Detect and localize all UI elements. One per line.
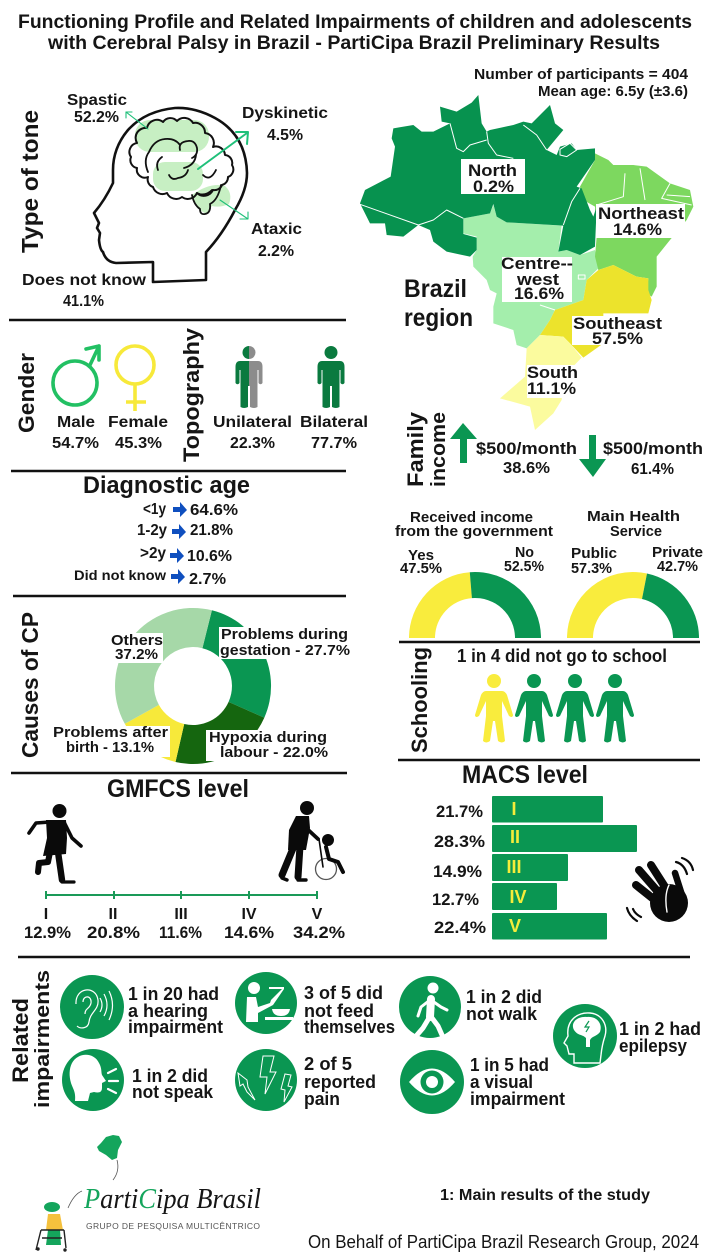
heading: related impairments bbox=[8, 970, 54, 1108]
label: above 500 per month: 38.6% bbox=[503, 460, 550, 477]
label: female: Female bbox=[108, 414, 168, 431]
label: bilateral: Bilateral bbox=[300, 414, 368, 431]
bar IV: 12.7% bbox=[432, 890, 479, 909]
map label: North: North bbox=[468, 161, 517, 180]
bar III: III bbox=[506, 857, 522, 877]
label: yes bbox=[400, 547, 442, 577]
text: 1 in 20 had bbox=[128, 984, 219, 1004]
map label: Southeast bbox=[572, 314, 664, 348]
map label: Southeast: 57.5% bbox=[592, 329, 643, 348]
label: problems after birth: Problems after bbox=[53, 724, 168, 741]
label: bilateral: 77.7% bbox=[311, 435, 357, 452]
map label: Centre-west: Centre-- bbox=[501, 254, 573, 273]
arrows: tone indicators bbox=[126, 112, 248, 219]
icon: lightning bolts bbox=[235, 1049, 297, 1111]
level I: I bbox=[44, 906, 48, 923]
icon: green child 3 bbox=[596, 674, 634, 742]
row: under 1y: 64.6% bbox=[190, 502, 238, 519]
label: unilateral: Unilateral bbox=[213, 414, 292, 431]
bar II bbox=[434, 825, 637, 852]
caption: main results: 1: Main results of the study bbox=[440, 1187, 650, 1204]
label: hypoxia during labour bbox=[206, 729, 330, 761]
panel: participants summary: Number of participants = 404 bbox=[474, 66, 689, 83]
label: does not know: Does not know bbox=[22, 272, 147, 289]
gauge chart bbox=[567, 572, 699, 638]
icon: running child bbox=[29, 804, 81, 882]
label: private: Private bbox=[652, 544, 703, 561]
label: others: Others bbox=[111, 632, 163, 649]
item: speaking bbox=[62, 1049, 214, 1111]
bar III: 14.9% bbox=[433, 862, 482, 881]
icon: person eating bbox=[235, 972, 297, 1034]
row: did not know bbox=[74, 567, 226, 588]
label: no: 52.5% bbox=[504, 558, 544, 575]
bar I bbox=[436, 796, 603, 822]
level II: 20.8% bbox=[87, 923, 140, 942]
icon: green child 1 bbox=[515, 674, 553, 742]
label: male: 54.7% bbox=[52, 435, 99, 452]
map label: South bbox=[527, 363, 579, 398]
panel: causes of CP bbox=[17, 608, 350, 764]
icon: yellow child bbox=[475, 674, 513, 742]
bar IV bbox=[432, 883, 557, 910]
label: below 500 per month bbox=[603, 439, 703, 478]
label: public: 57.3% bbox=[571, 560, 612, 577]
label: female bbox=[108, 414, 168, 452]
level III bbox=[159, 906, 202, 942]
level II: II bbox=[109, 906, 117, 923]
logo subtitle: GRUPO DE PESQUISA MULTICÊNTRICO bbox=[86, 1221, 260, 1231]
label: ataxic: Ataxic bbox=[251, 221, 302, 238]
text bbox=[304, 1054, 376, 1109]
row: over 2y: 10.6% bbox=[187, 548, 232, 565]
bar V: V bbox=[509, 916, 521, 936]
heading: diagnostic age: Diagnostic age bbox=[83, 472, 250, 499]
label: problems after birth: birth - 13.1% bbox=[66, 739, 154, 756]
icon: walking person bbox=[399, 976, 461, 1038]
text bbox=[470, 1055, 565, 1109]
text: epilepsy bbox=[619, 1036, 687, 1056]
icon: bilateral person bbox=[318, 346, 344, 408]
label: ataxic bbox=[251, 221, 302, 260]
heading bbox=[395, 509, 553, 540]
item: pain bbox=[235, 1049, 376, 1111]
heading: type of tone: Type of tone bbox=[17, 110, 43, 253]
level V: V bbox=[312, 906, 323, 923]
label: male: Male bbox=[57, 414, 95, 431]
item: epilepsy bbox=[553, 1004, 701, 1068]
label: spastic bbox=[67, 92, 127, 126]
icon: speaking head bbox=[62, 1049, 124, 1111]
heading: from the government bbox=[395, 523, 553, 540]
label: no: No bbox=[515, 544, 534, 561]
label: above 500 per month: $500/month bbox=[476, 439, 577, 458]
heading: Service bbox=[610, 523, 662, 540]
heading: family income bbox=[403, 411, 450, 487]
row: under 1y bbox=[143, 501, 238, 519]
icon: ear bbox=[60, 975, 124, 1039]
label: problems during gestation bbox=[219, 626, 350, 659]
label: yes: 47.5% bbox=[400, 560, 442, 577]
text: not feed bbox=[304, 1001, 374, 1021]
heading bbox=[587, 508, 680, 540]
map label: Northeast bbox=[596, 204, 685, 239]
panel: type of tone bbox=[17, 92, 328, 310]
panel: diagnostic age bbox=[74, 472, 250, 588]
heading: schooling: Schooling bbox=[407, 647, 432, 753]
bar II: II bbox=[510, 827, 520, 847]
heading: Brazil region: Brazil bbox=[404, 275, 467, 303]
map label: Southeast: Southeast bbox=[573, 314, 662, 333]
bar I: I bbox=[511, 799, 517, 819]
bar I: 21.7% bbox=[436, 802, 483, 821]
row: over 2y: >2y bbox=[140, 545, 166, 562]
title bbox=[18, 11, 692, 54]
text: 1 in 2 did bbox=[466, 987, 542, 1007]
text: impairment bbox=[470, 1089, 565, 1109]
item: walking bbox=[399, 976, 542, 1038]
timeline bbox=[46, 891, 317, 899]
label: spastic: 52.2% bbox=[74, 109, 119, 126]
text bbox=[619, 1019, 701, 1056]
level I bbox=[24, 906, 71, 942]
icon: brain bbox=[129, 118, 233, 214]
panel: gender bbox=[14, 346, 168, 452]
label: problems after birth bbox=[52, 724, 170, 757]
row: did not know: Did not know bbox=[74, 567, 166, 583]
icon: male symbol bbox=[53, 346, 99, 405]
level III: III bbox=[174, 906, 188, 923]
map label: Centre-west: 16.6% bbox=[514, 284, 564, 303]
label: does not know bbox=[22, 272, 147, 310]
label: does not know: 41.1% bbox=[63, 293, 104, 310]
icon: green child 2 bbox=[556, 674, 594, 742]
panel: Brazil region map bbox=[360, 95, 693, 430]
panel: family income bbox=[403, 411, 703, 487]
heading: Main Health bbox=[587, 508, 680, 525]
label: public bbox=[571, 545, 617, 577]
text: a visual bbox=[470, 1072, 533, 1092]
label: dyskinetic bbox=[242, 105, 328, 144]
panel: main health service bbox=[567, 508, 703, 638]
donut chart bbox=[115, 608, 271, 764]
bar IV: IV bbox=[509, 887, 527, 907]
item: vision bbox=[400, 1050, 565, 1114]
bar V bbox=[434, 913, 607, 940]
icon: Brazil balloon bbox=[68, 1135, 122, 1208]
heading: family income: Family bbox=[403, 411, 428, 487]
text bbox=[128, 984, 223, 1037]
label: private: 42.7% bbox=[657, 558, 698, 575]
heading: gender: Gender bbox=[14, 353, 39, 433]
label: spastic: Spastic bbox=[67, 92, 127, 109]
map label: North: 0.2% bbox=[473, 177, 514, 196]
level I: 12.9% bbox=[24, 923, 71, 942]
label: problems during gestation: Problems during bbox=[221, 626, 348, 643]
level V bbox=[293, 906, 345, 942]
text: impairment bbox=[128, 1017, 223, 1037]
text: not walk bbox=[466, 1004, 538, 1024]
label: no bbox=[504, 544, 544, 575]
icon: up arrow bbox=[450, 423, 477, 463]
level IV: IV bbox=[241, 906, 257, 923]
label: others: 37.2% bbox=[115, 646, 158, 663]
text bbox=[132, 1066, 214, 1102]
text bbox=[304, 983, 395, 1037]
text: a hearing bbox=[128, 1001, 208, 1021]
label: hypoxia during labour: labour - 22.0% bbox=[220, 744, 328, 761]
row: 1-2y: 21.8% bbox=[190, 522, 233, 539]
heading: Brazil region: region bbox=[404, 304, 473, 332]
heading: family income: income bbox=[428, 412, 450, 487]
logo: PartiCipa Brasil bbox=[36, 1135, 261, 1252]
icon: unilateral person bbox=[236, 346, 262, 408]
heading: related impairments: Related bbox=[8, 998, 33, 1083]
map label: Centre-west bbox=[501, 254, 573, 303]
title: Functioning Profile and Related Impairments of children and adolescents bbox=[18, 11, 692, 33]
label: ataxic: 2.2% bbox=[258, 243, 294, 260]
bar III bbox=[433, 854, 568, 881]
text: not speak bbox=[132, 1082, 214, 1102]
map label: Centre-west: west bbox=[516, 270, 559, 289]
label: below 500 per month: 61.4% bbox=[631, 461, 674, 478]
text: themselves bbox=[304, 1017, 395, 1037]
panel: related impairments bbox=[8, 970, 701, 1114]
text: 3 of 5 did bbox=[304, 983, 383, 1003]
row: over 2y bbox=[140, 545, 232, 565]
panel: participants summary bbox=[474, 66, 689, 100]
heading: causes of CP: Causes of CP bbox=[17, 612, 43, 758]
map label: South: 11.1% bbox=[527, 379, 576, 398]
label: unilateral: 22.3% bbox=[230, 435, 275, 452]
map of Brazil bbox=[360, 95, 693, 430]
icon: eye bbox=[400, 1050, 464, 1114]
panel: schooling bbox=[407, 646, 667, 753]
heading: related impairments: impairments bbox=[32, 970, 54, 1108]
label: others bbox=[109, 632, 163, 663]
panel: MACS level bbox=[432, 761, 693, 940]
heading: GMFCS level: GMFCS level bbox=[107, 775, 249, 803]
label: dyskinetic: 4.5% bbox=[267, 127, 303, 144]
label: unilateral bbox=[213, 414, 292, 452]
icon: head outline bbox=[94, 108, 247, 282]
icon: waving hand bbox=[627, 858, 693, 922]
heading: topography: Topography bbox=[179, 327, 204, 462]
heading: Brazil region bbox=[404, 275, 473, 332]
row: 1-2y bbox=[137, 522, 233, 539]
label: bilateral bbox=[300, 414, 368, 452]
level II bbox=[87, 906, 140, 942]
bar II: 28.3% bbox=[434, 832, 485, 851]
label: female: 45.3% bbox=[115, 435, 162, 452]
text: 1 in 2 did bbox=[132, 1066, 208, 1086]
map label: North bbox=[461, 159, 525, 196]
label: dyskinetic: Dyskinetic bbox=[242, 105, 328, 122]
icon: head with brain bbox=[553, 1004, 617, 1068]
label: male bbox=[52, 414, 99, 452]
panel: participants summary: Mean age: 6.5y (±3.6) bbox=[538, 83, 688, 100]
label: yes: Yes bbox=[408, 547, 434, 564]
heading: Received income bbox=[410, 509, 533, 526]
map label: Northeast: Northeast bbox=[598, 204, 684, 223]
label: public: Public bbox=[571, 545, 617, 562]
heading: MACS level: MACS level bbox=[462, 761, 588, 789]
map label: Northeast: 14.6% bbox=[613, 220, 662, 239]
item: hearing impairment bbox=[60, 975, 223, 1039]
level IV: 14.6% bbox=[224, 923, 274, 942]
label: above 500 per month bbox=[476, 439, 577, 477]
text bbox=[466, 987, 542, 1024]
icon: adult pushing wheelchair bbox=[282, 801, 343, 880]
bar V: 22.4% bbox=[434, 918, 486, 937]
label: hypoxia during labour: Hypoxia during bbox=[209, 729, 327, 746]
icon: female symbol bbox=[116, 346, 154, 411]
level V: 34.2% bbox=[293, 923, 345, 942]
logo wordmark: PartiCipa Brasil bbox=[83, 1184, 261, 1215]
text: 1 in 4 did not go to school: 1 in 4 did not go to school bbox=[457, 646, 667, 666]
map label: South: South bbox=[527, 363, 578, 382]
text: 2 of 5 bbox=[304, 1054, 352, 1074]
row: under 1y: <1y bbox=[143, 501, 166, 518]
text: pain bbox=[304, 1089, 340, 1109]
icon: child with walker bbox=[36, 1202, 67, 1252]
label: problems during gestation: gestation - 27.7% bbox=[220, 642, 350, 659]
level IV bbox=[224, 906, 274, 942]
text: 1 in 2 had bbox=[619, 1019, 701, 1039]
label: private bbox=[652, 544, 703, 575]
panel: received income from the government bbox=[395, 509, 553, 638]
title: with Cerebral Palsy in Brazil - PartiCipa Brazil Preliminary Results bbox=[47, 32, 660, 54]
item: feeding bbox=[235, 972, 395, 1037]
text: 1 in 5 had bbox=[470, 1055, 549, 1075]
text: reported bbox=[304, 1072, 376, 1092]
row: 1-2y: 1-2y bbox=[137, 522, 167, 539]
label: below 500 per month: $500/month bbox=[603, 439, 703, 458]
panel: topography bbox=[179, 327, 368, 462]
row: did not know: 2.7% bbox=[189, 571, 226, 588]
level III: 11.6% bbox=[159, 923, 202, 942]
gauge chart bbox=[409, 572, 541, 638]
panel: GMFCS level bbox=[24, 775, 345, 942]
icon: down arrow bbox=[579, 435, 606, 477]
